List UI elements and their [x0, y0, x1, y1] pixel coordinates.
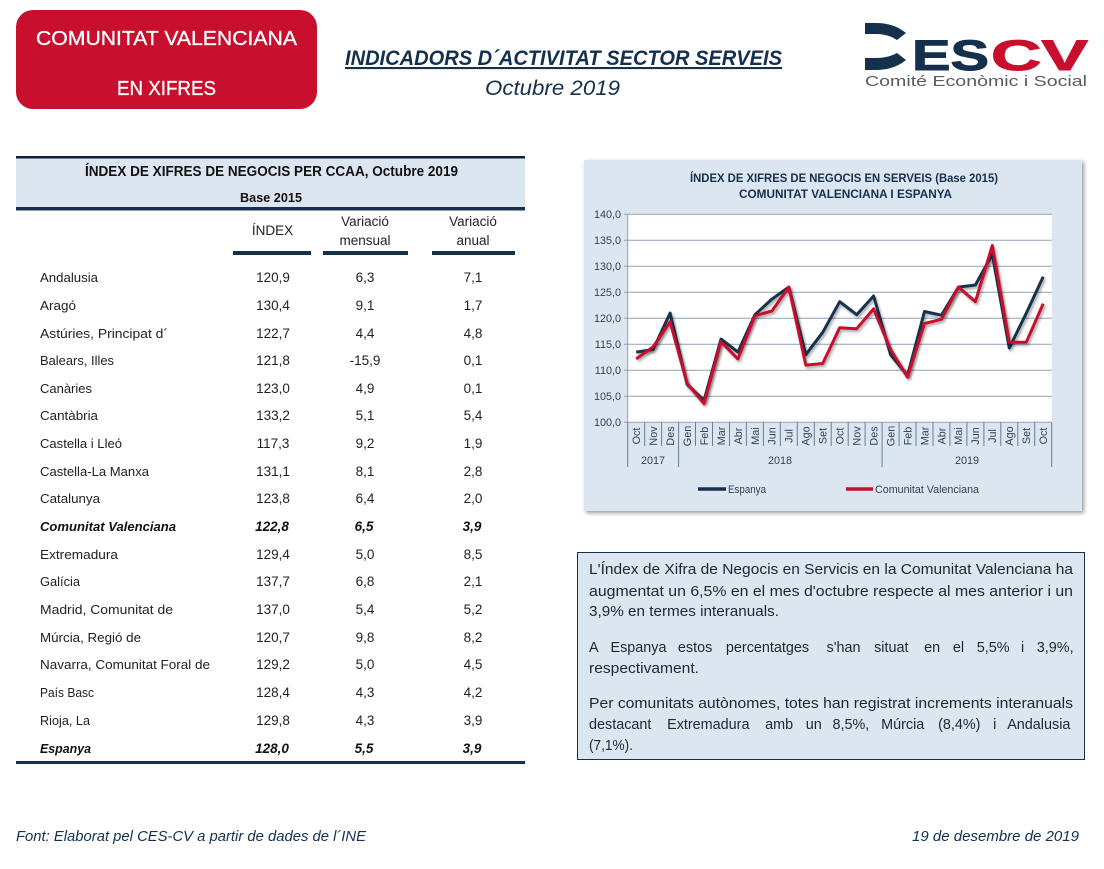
logo: CES CV: Comité Econòmic i Social — [865, 74, 1087, 90]
table rows: Astúries, Principat d´ — [40, 326, 168, 341]
table rows: 4,2 — [464, 685, 482, 700]
footer: source: Font: Elaborat pel CES-CV a partir de dades de l´INE — [16, 829, 366, 845]
table rows: 9,1 — [356, 298, 374, 313]
y axis labels: 125,0 — [594, 287, 621, 299]
table rows: Aragó — [40, 298, 76, 313]
text box: commentary: en — [924, 640, 940, 656]
title — [345, 47, 782, 100]
chart legend: Espanya — [728, 484, 767, 496]
logo: CES CV: CV — [991, 32, 1089, 80]
x axis month labels: Oct — [834, 428, 846, 444]
table rows: 6,8 — [356, 574, 374, 589]
x axis month labels: Set — [818, 428, 830, 444]
table rows: Extremadura — [40, 547, 119, 562]
x axis month labels: Set — [1021, 428, 1033, 444]
table rows: Andalusia — [40, 270, 99, 285]
table rows: 6,4 — [356, 491, 375, 506]
text box: commentary: (8,4%) — [938, 717, 980, 733]
table rows: 123,8 — [256, 491, 290, 506]
table rows: 121,8 — [256, 353, 290, 368]
table rows: 8,2 — [464, 630, 482, 645]
x axis month labels: Feb — [699, 427, 711, 445]
table rows: 4,4 — [356, 326, 375, 341]
table rows: 128,0 — [255, 741, 289, 756]
column headers: Variació — [341, 214, 389, 229]
text box: commentary: i — [1021, 640, 1024, 656]
text box: commentary: Andalusia — [1007, 717, 1070, 733]
table rows: País Basc — [40, 685, 94, 700]
table rows: 133,2 — [256, 408, 290, 423]
y axis labels: 135,0 — [594, 235, 621, 247]
table rows: 137,7 — [256, 574, 290, 589]
series: Espanya — [636, 254, 1043, 400]
column headers: mensual — [339, 233, 391, 248]
table rows: 2,8 — [464, 464, 482, 479]
table rows: Castella-La Manxa — [40, 464, 150, 479]
table rows: 3,9 — [464, 713, 482, 728]
x axis month labels: Mai — [750, 427, 762, 445]
text box: commentary: amb — [765, 717, 793, 733]
table rows: Madrid, Comunitat de — [40, 602, 173, 617]
table rows: 129,4 — [256, 547, 290, 562]
table rows: Canàries — [40, 381, 92, 396]
table rows: 4,3 — [356, 685, 374, 700]
text box: commentary: destacant — [589, 717, 651, 733]
text box: commentary: i — [993, 717, 996, 733]
table rows: 0,1 — [464, 353, 482, 368]
x axis month labels: Jul — [784, 429, 796, 443]
text box: commentary: 8,5%, — [832, 717, 869, 733]
text box: commentary: Per comunitats autònomes, totes han registrat increments interanuals — [589, 696, 1073, 712]
x axis month labels: Nov — [648, 426, 660, 446]
x axis month labels: Des — [665, 426, 677, 446]
table rows: 122,7 — [256, 326, 290, 341]
text box: commentary: situat — [874, 640, 909, 656]
table rows: Balears, Illes — [40, 353, 114, 368]
text box: commentary: augmentat un 6,5% en el mes d'octubre respecte al mes anterior i un — [589, 584, 1073, 600]
x axis month labels: Jun — [970, 427, 982, 445]
table rows: 4,9 — [356, 381, 374, 396]
table rows: 130,4 — [256, 298, 290, 313]
footer: date: 19 de desembre de 2019 — [912, 829, 1079, 845]
table rows: 123,0 — [256, 381, 290, 396]
table rows: 131,1 — [256, 464, 290, 479]
table rows: 3,9 — [463, 519, 482, 534]
text box: commentary: Espanya — [610, 640, 667, 656]
table rows: 7,1 — [464, 270, 482, 285]
x axis month labels — [631, 426, 1050, 446]
table rows: Comunitat Valenciana — [40, 519, 176, 534]
x axis month labels: Jul — [987, 429, 999, 443]
table rows: 8,5 — [464, 547, 482, 562]
x axis month labels: Abr — [733, 427, 745, 444]
table rows: 2,1 — [464, 574, 482, 589]
chart legend: Comunitat Valenciana — [875, 484, 980, 496]
text box: commentary: estos — [678, 640, 712, 656]
table rows: 129,8 — [256, 713, 290, 728]
table rows: 128,4 — [256, 685, 290, 700]
table rows: 5,1 — [356, 408, 374, 423]
x axis month labels: Mai — [953, 427, 965, 445]
table rows: 117,3 — [257, 436, 289, 451]
table heading — [16, 156, 525, 210]
text box: commentary: A — [589, 640, 599, 656]
table rows: Múrcia, Regió de — [40, 630, 141, 645]
x axis year labels: 2017 — [641, 455, 665, 467]
table rows: -15,9 — [350, 353, 380, 368]
x axis month labels: Feb — [902, 427, 914, 445]
column headers: Variació — [449, 214, 497, 229]
x axis year labels: 2018 — [768, 455, 792, 467]
x axis year labels — [641, 455, 979, 467]
table rows: Galícia — [40, 574, 81, 589]
table rows: 1,7 — [464, 298, 482, 313]
text box: commentary: s'han — [826, 640, 860, 656]
x axis month labels: Ago — [1004, 426, 1016, 446]
table rows: 2,0 — [464, 491, 482, 506]
table rows: 5,0 — [356, 657, 374, 672]
chart title: COMUNITAT VALENCIANA I ESPANYA — [739, 189, 952, 201]
panel: line chart — [584, 160, 1082, 511]
column headers — [233, 214, 515, 255]
text box: commentary: el — [953, 640, 964, 656]
x axis month labels: Gen — [682, 426, 694, 446]
title: Octubre 2019 — [485, 77, 620, 100]
table rows: 3,9 — [463, 741, 482, 756]
text box: commentary: 3,9% en termes interanuals. — [589, 604, 779, 620]
y axis labels: 140,0 — [594, 209, 621, 221]
panel: data table — [16, 156, 525, 764]
table rows: 5,4 — [356, 602, 375, 617]
text box: commentary: 5,5% — [977, 640, 1010, 656]
table rows: 9,2 — [356, 436, 374, 451]
table rows: 137,0 — [256, 602, 290, 617]
table rows: 1,9 — [464, 436, 482, 451]
table heading: ÍNDEX DE XIFRES DE NEGOCIS PER CCAA, Octubre 2019 — [85, 163, 458, 180]
table rows: 5,5 — [355, 741, 374, 756]
y axis labels: 115,0 — [595, 339, 621, 351]
title: INDICADORS D´ACTIVITAT SECTOR SERVEIS — [345, 47, 782, 70]
table rows: 0,1 — [464, 381, 482, 396]
column headers: anual — [456, 233, 490, 248]
table rows: 5,4 — [464, 408, 483, 423]
table rows: 6,3 — [356, 270, 374, 285]
table rows: 4,3 — [356, 713, 374, 728]
y axis labels: 120,0 — [594, 313, 621, 325]
y axis labels: 105,0 — [594, 391, 621, 403]
text box: commentary — [578, 552, 1084, 760]
table rows: 6,5 — [355, 519, 374, 534]
chart legend — [698, 484, 980, 496]
y axis labels: 100,0 — [594, 417, 621, 429]
logo: CES CV: ES — [912, 32, 989, 80]
banner: Comunitat Valenciana en xifres: EN XIFRES — [117, 78, 216, 100]
x axis month labels: Oct — [1038, 428, 1050, 444]
y axis labels: 130,0 — [594, 261, 621, 273]
table rows: 129,2 — [256, 657, 290, 672]
x axis month labels: Jun — [767, 427, 779, 445]
banner: Comunitat Valenciana en xifres: COMUNITAT VALENCIANA — [36, 28, 298, 50]
logo: CES CV — [865, 23, 1089, 90]
banner: Comunitat Valenciana en xifres — [16, 10, 317, 109]
table rows: Rioja, La — [40, 713, 91, 728]
chart title: ÍNDEX DE XIFRES DE NEGOCIS EN SERVEIS (Base 2015) — [690, 172, 998, 185]
column headers: ÍNDEX — [252, 223, 293, 238]
x axis month labels: Oct — [631, 428, 643, 444]
series: Comunitat Valenciana — [636, 246, 1043, 404]
x axis month labels: Gen — [885, 426, 897, 446]
table rows: Espanya — [40, 741, 91, 756]
x axis month labels: Nov — [852, 426, 864, 446]
x axis month labels: Des — [868, 426, 880, 446]
table rows: Castella i Lleó — [40, 436, 122, 451]
x axis month labels: Ago — [801, 426, 813, 446]
text box: commentary: Múrcia — [881, 717, 924, 733]
table rows: 4,8 — [464, 326, 482, 341]
chart title — [690, 172, 998, 201]
y axis labels: 110,0 — [595, 365, 621, 377]
x axis month labels: Abr — [936, 427, 948, 444]
text box: commentary: respectivament. — [589, 661, 699, 677]
table rows — [40, 270, 483, 756]
table rows: 120,9 — [256, 270, 290, 285]
x axis year labels: 2019 — [955, 455, 979, 467]
table rows: 4,5 — [464, 657, 482, 672]
table heading: Base 2015 — [240, 191, 302, 205]
text box: commentary: Extremadura — [667, 717, 749, 733]
y axis labels — [594, 209, 621, 429]
text box: commentary: 3,9%, — [1037, 640, 1074, 656]
text box: commentary: L'Índex de Xifra de Negocis en Servicis en la Comunitat Valenciana ha — [589, 561, 1073, 578]
table rows: Cantàbria — [40, 408, 99, 423]
plot area — [628, 214, 1052, 422]
table rows: Catalunya — [40, 491, 101, 506]
text box: commentary: (7,1%). — [589, 738, 633, 754]
table rows: 122,8 — [255, 519, 289, 534]
table rows: 5,0 — [356, 547, 374, 562]
table rows: 9,8 — [356, 630, 374, 645]
text box: commentary: percentatges — [726, 640, 809, 656]
table rows: 120,7 — [256, 630, 290, 645]
table rows: Navarra, Comunitat Foral de — [40, 657, 210, 672]
text box: commentary: un — [806, 717, 822, 733]
table rows: 8,1 — [356, 464, 374, 479]
x axis month labels: Mar — [919, 426, 931, 445]
x axis month labels: Mar — [716, 426, 728, 445]
table rows: 5,2 — [464, 602, 482, 617]
